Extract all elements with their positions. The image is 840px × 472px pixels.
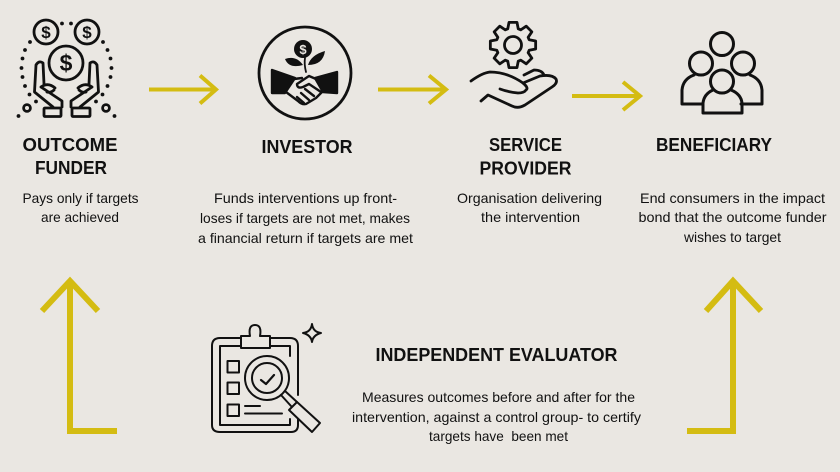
text: service provider description: the intervention: [481, 209, 580, 225]
text: investor description: Funds interventions up front-: [214, 190, 397, 206]
heading: outcome funder: FUNDER: [35, 157, 107, 178]
text: independent evaluator description: intervention, against a control group- to certify: [352, 409, 641, 425]
text: independent evaluator description: Measures outcomes before and after for the: [362, 389, 635, 405]
icon: investor, handshake with plant: $: [299, 42, 307, 57]
text: beneficiary description: bond that the outcome funder: [638, 209, 827, 225]
icon: service provider, gear over hand: [471, 22, 556, 107]
arrow: evaluator to outcome funder: [42, 281, 117, 431]
icon: beneficiary, group of people: [682, 32, 762, 113]
heading: outcome funder: OUTCOME: [22, 134, 117, 155]
icon: evaluator, clipboard with magnifier: [212, 324, 321, 432]
text: independent evaluator description: targets have been met: [429, 428, 568, 444]
text: beneficiary description: End consumers in the impact: [640, 190, 825, 206]
text: independent evaluator description: [352, 389, 641, 444]
heading: service provider: [480, 134, 572, 178]
heading: beneficiary: BENEFICIARY: [656, 134, 773, 155]
text: investor description: a financial return if targets are met: [198, 230, 413, 246]
text: investor description: loses if targets are not met, makes: [200, 210, 410, 226]
heading: independent evaluator: INDEPENDENT EVALUATOR: [376, 344, 618, 365]
icon: outcome funder, hands with coins: $: [60, 50, 73, 76]
text: outcome funder description: Pays only if targets: [22, 190, 138, 206]
icon: outcome funder, hands with coins: [17, 20, 116, 118]
heading: service provider: PROVIDER: [480, 158, 572, 178]
text: service provider description: [457, 190, 602, 225]
heading: investor: INVESTOR: [262, 136, 352, 157]
text: outcome funder description: [22, 190, 138, 225]
arrow: provider to beneficiary: [572, 82, 640, 110]
text: beneficiary description: [638, 190, 827, 245]
icon: outcome funder, hands with coins: $: [82, 23, 92, 42]
arrow: evaluator to beneficiary: [687, 281, 761, 431]
arrow: funder to investor: [149, 76, 216, 104]
icon: investor, handshake with plant: [259, 27, 351, 119]
text: service provider description: Organisation delivering: [457, 190, 602, 206]
text: investor description: [198, 190, 413, 246]
icon: outcome funder, hands with coins: $: [41, 23, 51, 42]
text: beneficiary description: wishes to target: [683, 229, 781, 245]
heading: service provider: SERVICE: [489, 134, 562, 155]
arrow: investor to provider: [378, 76, 446, 104]
text: outcome funder description: are achieved: [41, 209, 119, 225]
heading: outcome funder: [22, 134, 117, 178]
